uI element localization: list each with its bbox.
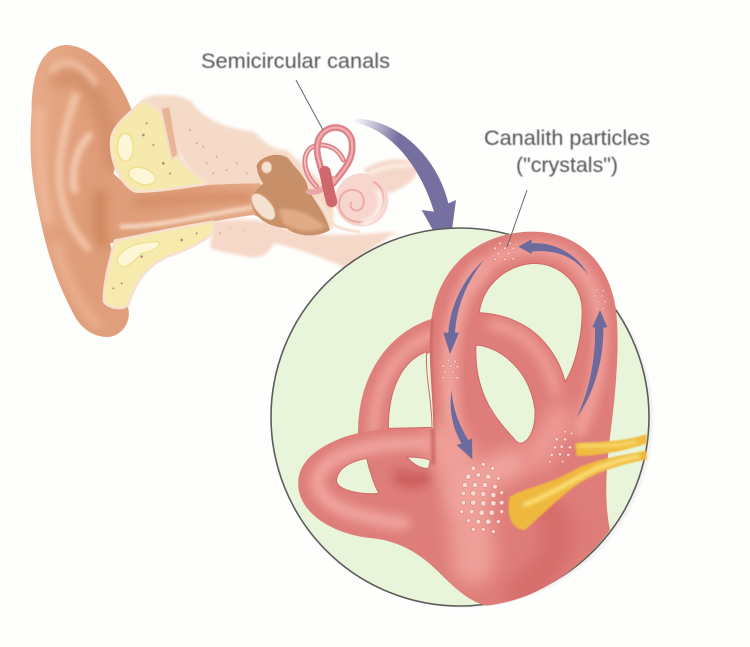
leader line: semicircular canals: [296, 80, 323, 130]
ear cross-section illustration: [31, 45, 419, 337]
pinna shading and highlights: [39, 63, 253, 327]
label: canalith particles: Canalith particles: [484, 127, 650, 150]
tissue stripe: [161, 106, 178, 159]
bone texture: [189, 129, 248, 234]
inner ear silhouette: [298, 232, 618, 606]
pinna and ear canal: [31, 45, 283, 337]
label: crystals: ("crystals"): [516, 154, 618, 177]
flow arrow: down left: [443, 260, 484, 354]
inner ear enlarged: [298, 232, 647, 606]
upper yellow cartilage: [111, 100, 207, 192]
pale bone and soft tissue: [143, 95, 419, 268]
small semicircular canals: [305, 127, 352, 202]
leader line: canalith particles: [507, 190, 527, 247]
lower yellow cartilage: [104, 222, 213, 308]
ossicles: [247, 161, 280, 224]
canalith particles: [442, 242, 606, 534]
cartilage cavities: [117, 133, 158, 188]
rear arch highlight: [373, 329, 550, 437]
circle shadow: [275, 230, 653, 608]
big curved arrow: [353, 119, 456, 257]
openings between canals: [336, 263, 582, 494]
nerve fibres: [509, 434, 647, 530]
cochlea: [335, 173, 388, 227]
middle ear cavity: [251, 155, 330, 235]
cartilage speckles: [112, 122, 198, 289]
tube and body highlights: [317, 248, 601, 593]
tympanic edge: [317, 198, 360, 232]
flow arrow: top: [518, 239, 588, 275]
cochlear nerve streaks: [370, 165, 415, 173]
label: semicircular canals: Semicircular canals: [201, 50, 390, 73]
lower cartilage cavity: [117, 242, 159, 267]
magnified circle: [271, 228, 649, 606]
rear arch canal: [373, 329, 553, 437]
flow arrow: up right: [577, 310, 607, 417]
cavity lighter area: [278, 209, 325, 231]
flow arrow: down centre: [451, 390, 472, 459]
